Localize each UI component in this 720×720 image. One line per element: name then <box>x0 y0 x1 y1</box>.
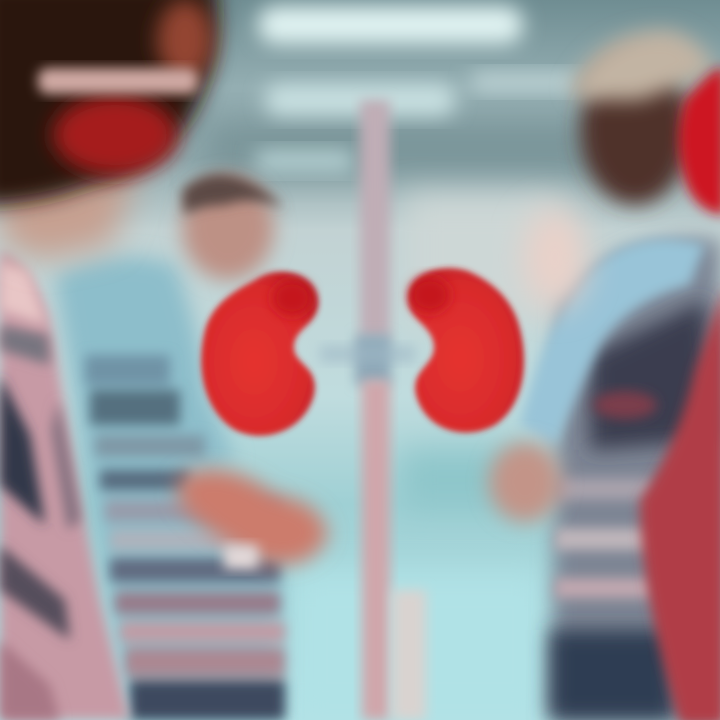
right figure stripes <box>555 478 655 598</box>
middle figure arm <box>178 470 328 564</box>
right figure shoulder glow <box>523 208 587 308</box>
right figure red accent <box>593 391 657 419</box>
middle figure stripes <box>85 355 285 720</box>
left figure head <box>0 0 217 205</box>
left figure dark stripes <box>0 262 80 720</box>
icon: left kidney <box>201 272 318 436</box>
person: middle figure <box>55 175 328 720</box>
person: right figure <box>489 30 720 720</box>
middle figure shirt <box>55 257 280 720</box>
right figure forearm <box>489 442 561 522</box>
right figure back <box>550 239 720 720</box>
center pole <box>320 100 426 720</box>
right figure red garment <box>640 285 720 720</box>
middle figure head <box>182 175 285 280</box>
right figure head <box>570 30 720 215</box>
person: left foreground figure <box>0 0 217 720</box>
right figure blue sleeve <box>520 239 705 445</box>
ceiling lights <box>255 6 580 172</box>
left figure body <box>0 250 130 720</box>
icon: right kidney <box>408 268 524 433</box>
right figure dark torso <box>590 300 715 450</box>
right figure trousers <box>550 630 675 720</box>
left figure neck <box>0 165 140 260</box>
